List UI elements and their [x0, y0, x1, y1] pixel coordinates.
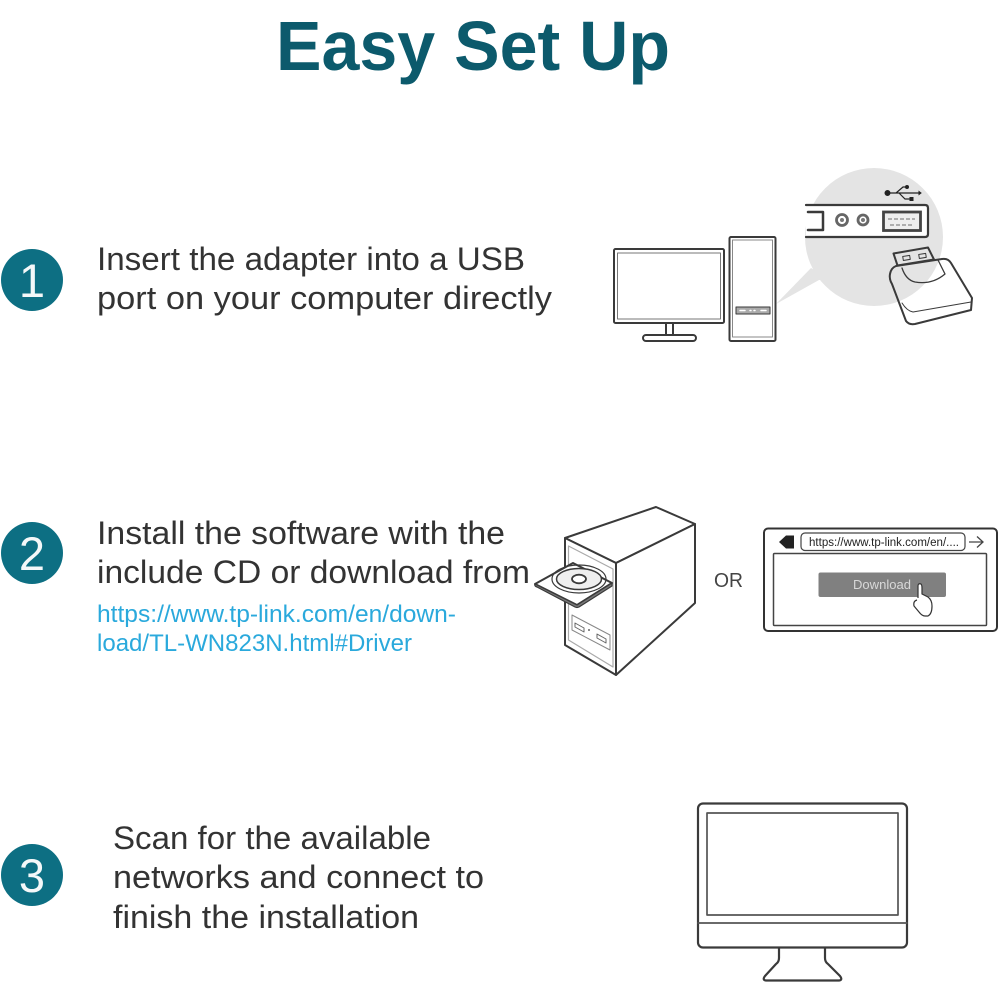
or label: OR	[714, 569, 743, 592]
back arrow	[779, 536, 794, 548]
illustration: desktop computer with USB adapter	[614, 168, 972, 341]
step 3 number badge	[1, 844, 63, 906]
illustration: desktop monitor	[698, 804, 907, 980]
step 2 number badge: 2	[19, 527, 45, 580]
download button	[818, 572, 946, 597]
download link	[97, 601, 456, 657]
forward arrow	[969, 536, 983, 548]
illustration: tower with CD tray	[535, 507, 695, 675]
icon: hand pointer	[914, 584, 932, 616]
address bar: https://www.tp-link.com/en/....	[809, 537, 959, 549]
step 1 text: port on your computer directly	[97, 280, 552, 316]
step 2 text: Install the software with the	[97, 515, 505, 551]
download button: Download	[853, 577, 911, 592]
title: Easy Set Up	[276, 7, 670, 85]
step 3 text: finish the installation	[113, 899, 419, 935]
step 2 text: include CD or download from	[97, 554, 530, 590]
monitor	[614, 249, 724, 341]
step 3 number badge: 3	[19, 849, 45, 902]
illustration: browser download window	[764, 528, 997, 631]
tower	[730, 237, 776, 341]
step 1 number badge: 1	[19, 254, 45, 307]
address bar	[801, 533, 965, 550]
step 2 text	[97, 515, 530, 590]
cd tray	[535, 563, 612, 608]
port panel	[806, 205, 928, 237]
step 2 number badge	[1, 522, 63, 584]
step 1 text: Insert the adapter into a USB	[97, 241, 525, 277]
download link: load/TL-WN823N.html#Driver	[97, 630, 412, 657]
step 3 text: networks and connect to	[113, 859, 484, 895]
step 3 text: Scan for the available	[113, 820, 431, 856]
icon: usb symbol	[885, 186, 921, 200]
step 3 text	[113, 820, 484, 935]
download link: https://www.tp-link.com/en/down-	[97, 601, 456, 628]
step 1 text	[97, 241, 552, 316]
usb adapter	[890, 248, 972, 324]
step 1 number badge	[1, 249, 63, 311]
zoom callout circle	[776, 168, 943, 306]
